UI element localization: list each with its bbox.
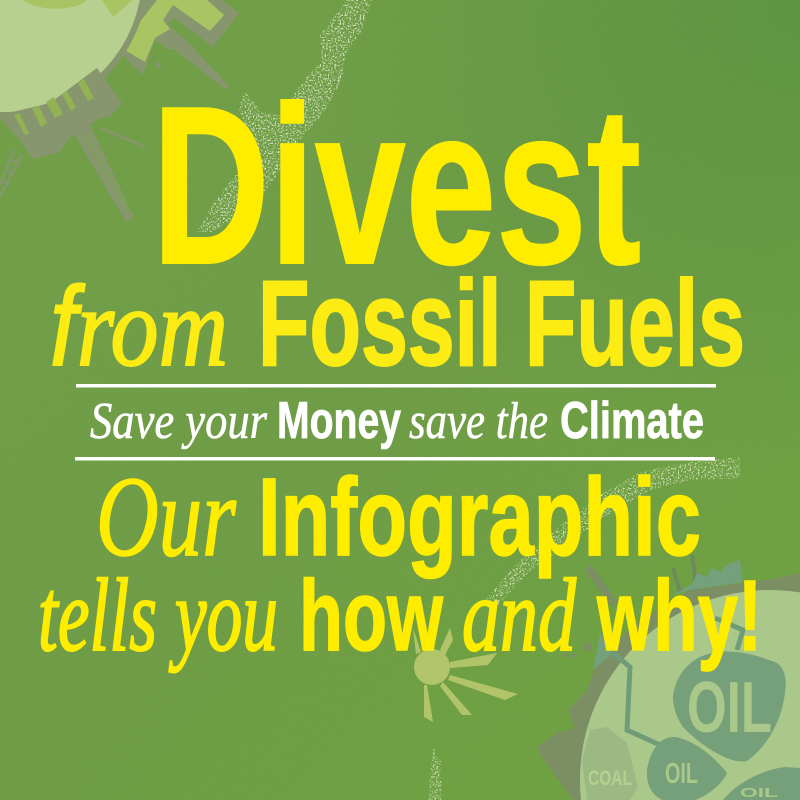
tells you: tells you — [38, 558, 278, 673]
refinery chimney 2 — [673, 555, 697, 592]
how: how — [299, 560, 443, 672]
factory outline — [115, 0, 239, 75]
rig arm — [101, 128, 145, 147]
dark land mass — [537, 573, 800, 800]
Save your: Save your — [90, 393, 268, 450]
teal factory — [673, 560, 743, 595]
small oil label: OIL — [665, 758, 698, 790]
planet rim — [0, 0, 148, 118]
factory chimney spike — [170, 36, 229, 90]
call to action line 2 — [38, 558, 762, 673]
coal blob — [582, 727, 638, 800]
and: and — [462, 558, 577, 673]
rig leg right — [73, 125, 134, 222]
Money: Money — [277, 392, 401, 450]
divider bottom — [75, 457, 715, 460]
third oil blob — [723, 767, 800, 800]
small oil blob — [647, 737, 727, 800]
chalk stripe: upper river — [197, 0, 372, 232]
rig leg left — [0, 150, 22, 197]
small valve dot — [155, 62, 161, 68]
pipes — [613, 618, 743, 745]
tagline — [90, 392, 704, 450]
illustration: sun — [413, 628, 518, 722]
teal triangle — [593, 633, 613, 670]
Our: Our — [96, 453, 236, 580]
rig leg lattice — [83, 134, 130, 214]
third oil label: OIL — [740, 785, 778, 800]
divider top — [76, 384, 716, 388]
planet disc — [0, 0, 142, 112]
oil platform — [0, 68, 122, 159]
planet diamond — [102, 0, 133, 17]
refinery chimney — [588, 567, 615, 605]
chalk stripe: lower right river — [428, 457, 740, 800]
platform windows — [14, 79, 94, 135]
planet disc — [580, 590, 800, 800]
planet continent — [23, 0, 87, 9]
factory fill — [120, 0, 224, 62]
illustration: top-left planet with oil rig and factory — [0, 0, 239, 222]
Climate: Climate — [560, 392, 704, 450]
save the: save the — [409, 393, 548, 450]
oil drips — [564, 636, 592, 658]
large oil blob — [673, 652, 786, 762]
coal label: COAL — [588, 767, 632, 790]
subtitle: from Fossil Fuels — [50, 255, 745, 391]
from: from — [50, 264, 228, 390]
illustration: bottom-right planet with fossil fuels — [537, 555, 800, 800]
call to action line 1 — [96, 453, 701, 580]
